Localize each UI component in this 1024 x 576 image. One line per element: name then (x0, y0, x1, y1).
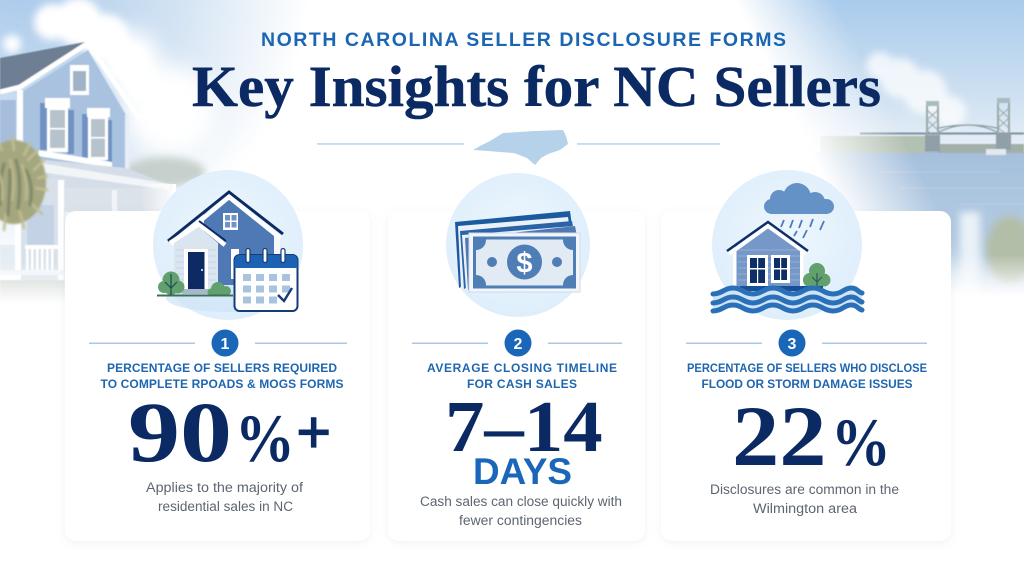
card 1 description: Applies to the majority of (146, 480, 303, 495)
title: Key Insights for NC Sellers (192, 54, 881, 119)
panel: card 1 (65, 170, 370, 541)
card 2 description: fewer contingencies (459, 513, 582, 528)
card 3 statistic: 22 (732, 388, 827, 484)
card 3 label (687, 361, 927, 391)
card 1 statistic (128, 384, 331, 480)
number badge 3: 3 (788, 336, 797, 353)
card 1 label: TO COMPLETE RPOADS & MOGS FORMS (100, 377, 344, 391)
card 2 statistic: 7–14 (445, 387, 603, 467)
card 3 description: Disclosures are common in the (710, 482, 899, 497)
subtitle: NORTH CAROLINA SELLER DISCLOSURE FORMS (261, 29, 786, 51)
number badge 1 (89, 330, 347, 356)
card 2 label: FOR CASH SALES (467, 377, 577, 391)
card 2 description (420, 494, 622, 528)
icon: flooded house under rain cloud (712, 170, 862, 320)
card 1 statistic: % (235, 400, 295, 476)
icon: stack of cash (446, 173, 590, 317)
card 3 label: PERCENTAGE OF SELLERS WHO DISCLOSE (687, 361, 927, 375)
icon: house with calendar (153, 170, 303, 320)
card 2 unit: DAYS (473, 451, 572, 492)
panel: card 3 (661, 170, 951, 541)
card 1 description (146, 480, 303, 514)
icon: stack of cash: $ (516, 248, 533, 280)
card 1 statistic: + (296, 399, 331, 467)
card 3 description (710, 482, 899, 516)
card 2 description: Cash sales can close quickly with (420, 494, 622, 509)
number badge 2 (412, 330, 622, 356)
card 3 statistic (732, 388, 891, 484)
panel: card 2 (388, 173, 645, 541)
number badge 1: 1 (221, 336, 230, 353)
number badge 3 (686, 330, 927, 356)
card 2 label (427, 361, 617, 391)
icon: palm tree (0, 137, 47, 230)
card 3 description: Wilmington area (753, 501, 858, 516)
card 3 label: FLOOD OR STORM DAMAGE ISSUES (702, 377, 912, 391)
card 3 statistic: % (831, 404, 891, 480)
background photo: river and bridge (700, 0, 1024, 326)
card 1 label: PERCENTAGE OF SELLERS REQUIRED (107, 361, 337, 375)
card 2 label: AVERAGE CLOSING TIMELINE (427, 361, 617, 375)
card 1 label (100, 361, 344, 391)
card 1 description: residential sales in NC (158, 499, 293, 514)
card 1 statistic: 90 (128, 384, 232, 480)
number badge 2: 2 (514, 336, 523, 353)
divider with North Carolina map (317, 130, 720, 165)
